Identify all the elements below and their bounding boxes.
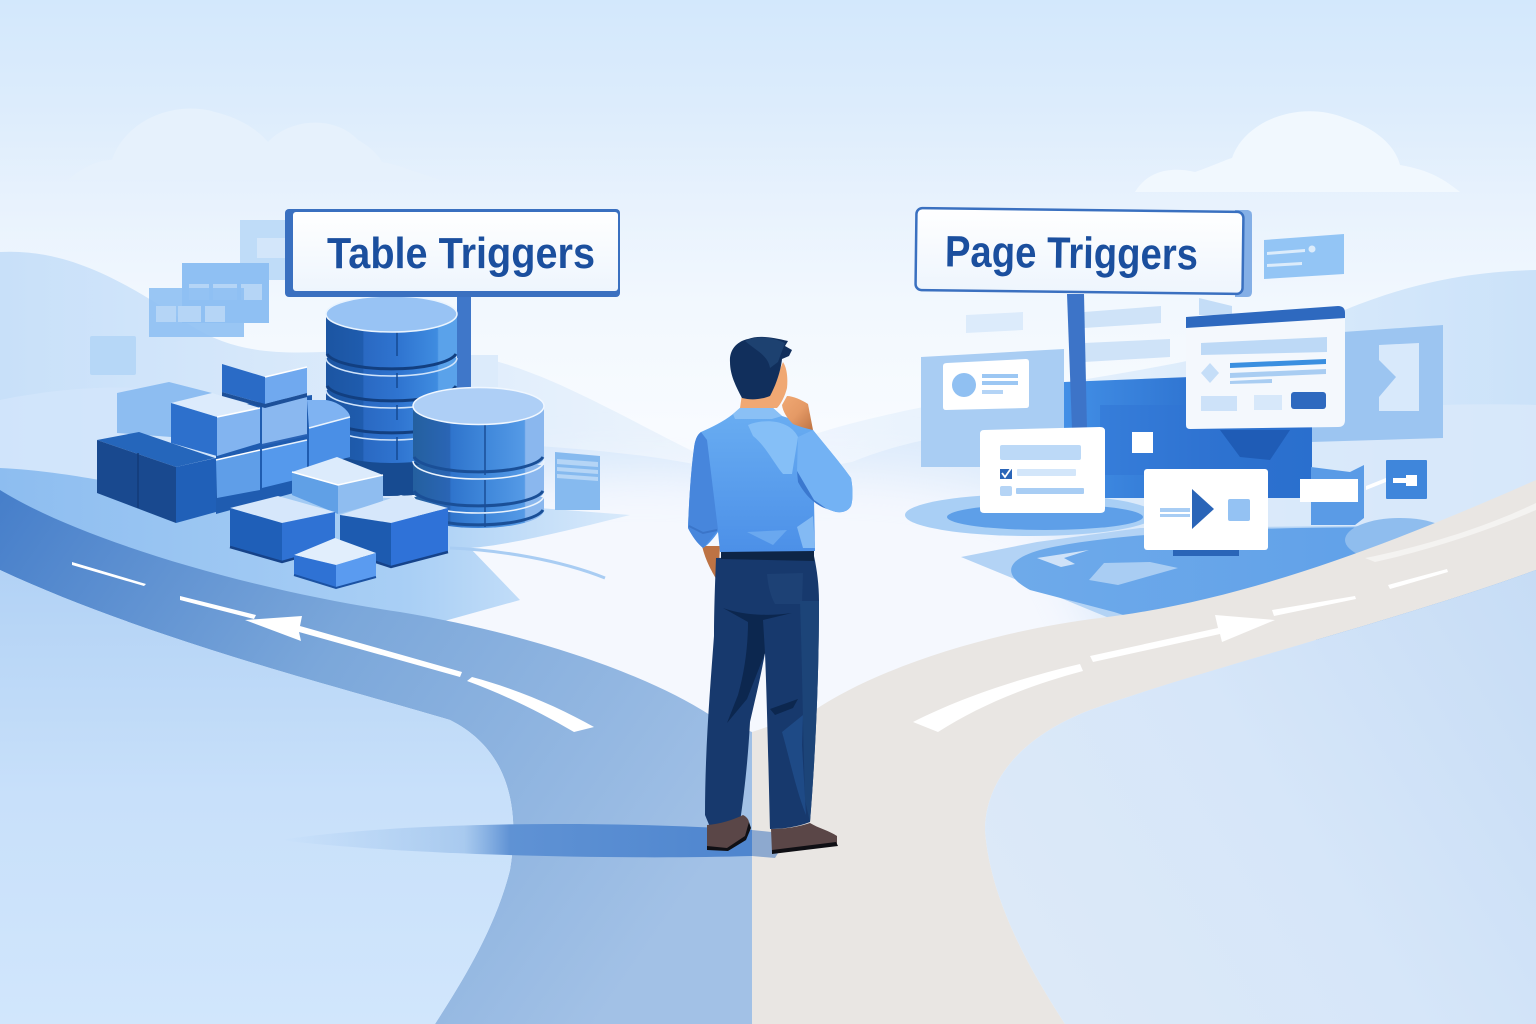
right sign post xyxy=(1067,294,1087,429)
block: top xyxy=(222,364,307,408)
right road markings with arrow xyxy=(913,503,1536,732)
ghost panel back xyxy=(182,263,269,323)
sign label: Page Triggers xyxy=(945,227,1198,279)
small white square xyxy=(1132,432,1153,453)
small box with label xyxy=(1300,465,1364,525)
left hand xyxy=(702,546,720,582)
right background panels xyxy=(921,234,1443,467)
block: rounded xyxy=(307,400,350,468)
ghost panel square xyxy=(90,336,136,375)
ghost panel right xyxy=(470,355,498,387)
hair xyxy=(730,337,792,399)
ghost bar xyxy=(966,312,1023,333)
left ground patch xyxy=(0,468,630,640)
ghost panel top xyxy=(240,220,288,280)
block: front small xyxy=(294,538,376,588)
block backing xyxy=(216,395,312,514)
ghost bar centre top xyxy=(1084,306,1161,328)
database stack front xyxy=(413,388,544,528)
left road markings with arrow xyxy=(72,562,594,732)
shoes xyxy=(707,815,838,854)
right road xyxy=(752,480,1536,1024)
lower right hill xyxy=(985,570,1536,1024)
ghost panel left xyxy=(921,349,1064,467)
cloud right xyxy=(1135,111,1460,192)
hills xyxy=(0,252,1536,760)
connector strip xyxy=(1366,478,1386,490)
cloud left xyxy=(68,109,440,180)
shadow of person xyxy=(280,824,790,858)
card: play arrow xyxy=(1144,469,1268,556)
ghost panel front xyxy=(149,288,244,337)
block: middle upper xyxy=(171,393,307,456)
block: middle lower xyxy=(216,440,307,498)
card: checklist xyxy=(980,427,1105,513)
lower left hill xyxy=(0,570,513,1024)
centre ground xyxy=(320,471,1180,800)
left sign post xyxy=(457,294,471,392)
document panel xyxy=(555,452,600,510)
left road xyxy=(0,490,752,1024)
right ground patch xyxy=(905,494,1536,640)
left background UI panels xyxy=(90,220,600,510)
block: back left xyxy=(97,432,216,523)
shirt xyxy=(688,407,852,552)
sign label: Table Triggers xyxy=(327,229,595,278)
block: front centre top xyxy=(292,457,383,514)
card: browser window xyxy=(1186,306,1345,429)
card: profile xyxy=(943,359,1029,410)
ghost tab xyxy=(1199,298,1232,315)
neck and face xyxy=(740,362,787,408)
database stack rear xyxy=(326,296,458,496)
ghost panel right xyxy=(1311,325,1443,442)
checkbox icon xyxy=(1000,469,1012,479)
stacked blocks xyxy=(97,364,448,588)
ghost block back xyxy=(117,382,212,440)
belt xyxy=(721,550,814,561)
raised hand xyxy=(782,396,813,430)
ghost bar centre lower xyxy=(1084,339,1170,362)
person from behind xyxy=(688,337,852,854)
sign: Page Triggers xyxy=(915,208,1252,297)
block: front left xyxy=(230,496,335,562)
block: front right xyxy=(340,495,448,567)
sign: Table Triggers xyxy=(285,209,620,297)
top right label chip xyxy=(1264,234,1344,279)
trousers xyxy=(705,556,819,829)
small icon tile xyxy=(1386,460,1427,499)
large blue panel xyxy=(1064,377,1312,498)
